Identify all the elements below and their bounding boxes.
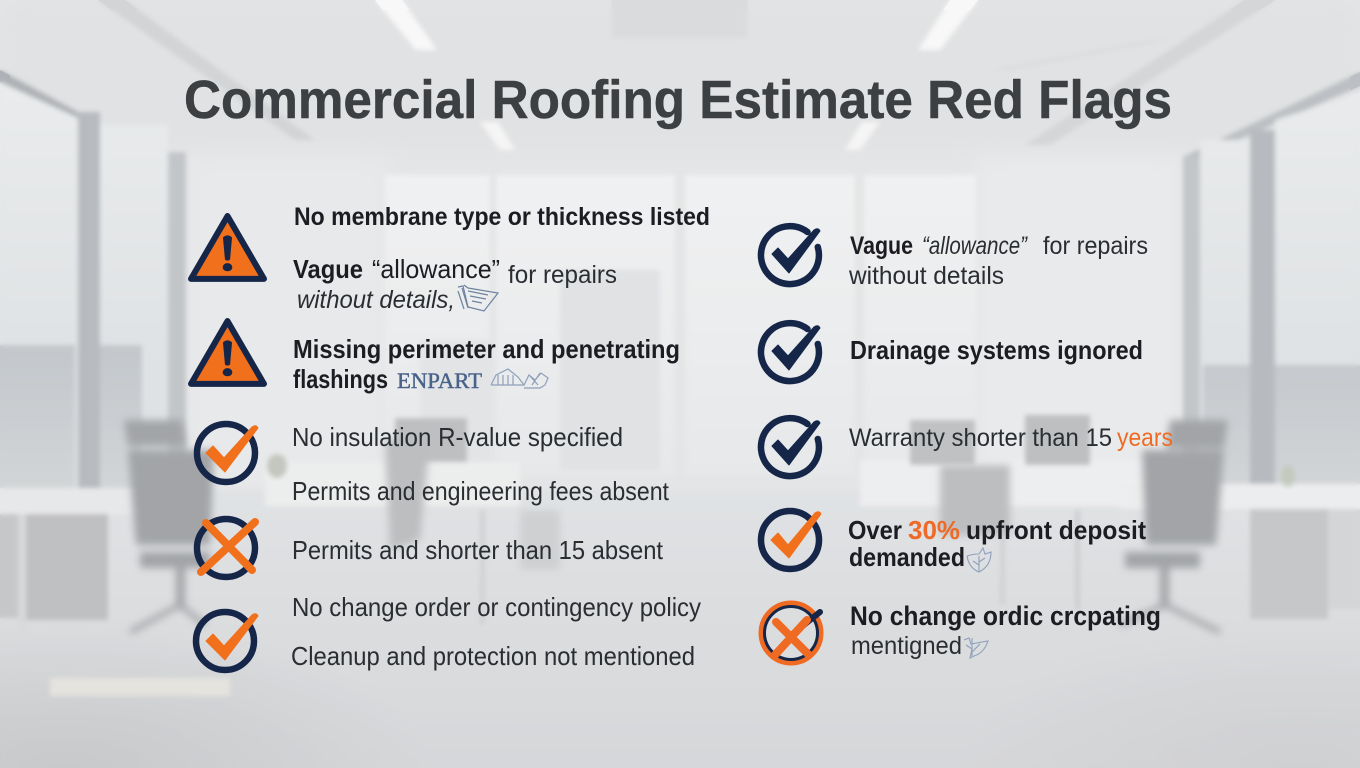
text: no change ordic: mentigned xyxy=(851,632,962,660)
text: vague allowance: Vague xyxy=(293,254,363,284)
text: no change ordic xyxy=(850,601,1161,660)
icon: sketch leaf xyxy=(967,548,991,572)
text: vague allowance: without details, xyxy=(297,286,455,314)
icon: sketch leaf 2 xyxy=(964,638,988,658)
text: vague allowance right: Vague xyxy=(850,232,913,260)
text: deposit: 30% xyxy=(908,515,960,545)
text: deposit xyxy=(848,515,1146,572)
icon: sketch document xyxy=(458,285,498,311)
text: missing perimeter: flashings xyxy=(293,364,388,394)
text: vague allowance right: for repairs xyxy=(1043,232,1148,260)
icon: sketch houses xyxy=(491,369,548,388)
text: permits shorter: Permits and shorter than 15 absent xyxy=(292,535,664,565)
label: sketch stamp: ENPART xyxy=(397,368,483,393)
text: permits fees: Permits and engineering fees absent xyxy=(292,476,670,506)
text: drainage: Drainage systems ignored xyxy=(850,335,1143,365)
title: Commercial Roofing Estimate Red Flags xyxy=(184,70,1172,130)
text: vague allowance xyxy=(293,254,617,314)
text: deposit: Over xyxy=(848,515,902,545)
text: vague allowance right: “allowance” xyxy=(922,232,1028,260)
text: warranty: Warranty shorter than 15 xyxy=(849,424,1112,452)
icon: warning triangle 2 xyxy=(191,321,264,384)
icon: orange x with navy check xyxy=(761,603,821,663)
text: insulation: No insulation R-value specified xyxy=(292,422,623,452)
text: warranty: years xyxy=(1117,424,1173,452)
icon: orange check in circle xyxy=(197,424,258,482)
icon: navy check 3 xyxy=(761,418,820,476)
panel: right column red flags xyxy=(761,226,1173,663)
text: no change ordic: No change ordic crcpating xyxy=(850,601,1161,631)
text: no membrane: No membrane type or thickness listed xyxy=(294,203,710,231)
text: change order: No change order or contingency policy xyxy=(292,592,701,622)
text: missing perimeter xyxy=(293,334,680,394)
icon: navy check 2 xyxy=(761,323,820,381)
icon: navy check 1 xyxy=(761,226,820,284)
icon: warning triangle 1 xyxy=(191,216,264,279)
text: vague allowance: “allowance” xyxy=(372,254,500,284)
icon: orange check in circle 2 xyxy=(196,612,258,670)
text: missing perimeter: Missing perimeter and penetrating xyxy=(293,334,680,364)
text: vague allowance right xyxy=(848,232,1148,290)
text: vague allowance right: without details xyxy=(848,262,1004,290)
text: cleanup: Cleanup and protection not mentioned xyxy=(291,641,695,671)
icon: orange x in circle xyxy=(197,519,255,577)
panel: left column red flags xyxy=(191,203,710,671)
text: deposit: upfront deposit xyxy=(966,515,1146,545)
icon: orange check in circle right xyxy=(761,511,821,569)
text: deposit: demanded xyxy=(849,542,965,572)
text: vague allowance: for repairs xyxy=(508,261,617,289)
